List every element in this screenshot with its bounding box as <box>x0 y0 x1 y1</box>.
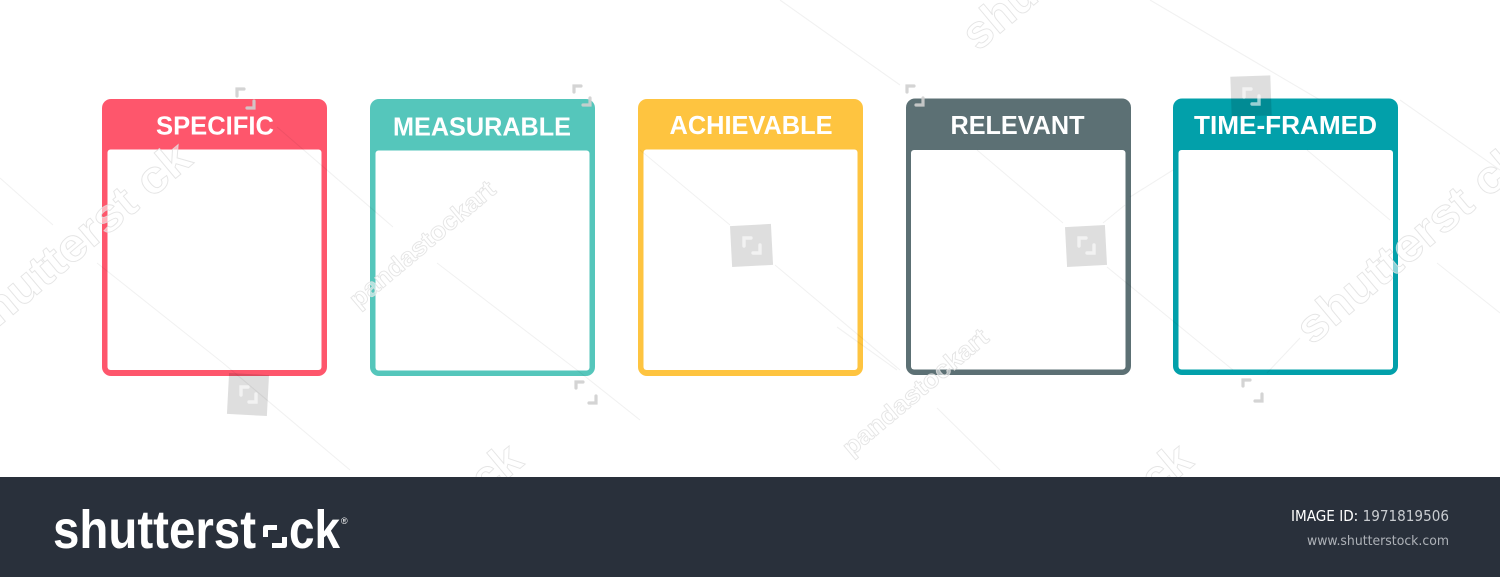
logo: shutterstock: shutterst <box>53 500 256 560</box>
logo: shutterstock: ® <box>341 516 348 526</box>
panel: achievable <box>638 99 863 376</box>
card body: achievable <box>644 150 858 370</box>
watermark layer: pandastockart <box>344 175 502 314</box>
heading: specific: SPECIFIC <box>156 110 274 140</box>
card body: time-framed <box>1178 150 1393 370</box>
panel: time-framed <box>1173 98 1398 375</box>
heading: achievable: ACHIEVABLE <box>670 110 832 140</box>
panel: relevant <box>906 98 1131 375</box>
card frame: measurable <box>370 99 595 376</box>
card frame: achievable <box>638 99 863 376</box>
card body: measurable <box>376 150 590 370</box>
website url: www.shutterstock.com <box>1307 533 1449 549</box>
watermark layer: ck <box>1129 432 1202 505</box>
watermark layer: pandastockart <box>837 323 995 462</box>
panel: specific <box>102 99 327 376</box>
card frame: specific <box>102 99 327 376</box>
watermark layer: ck <box>459 432 532 505</box>
card frame: relevant <box>906 98 1131 375</box>
footer bar <box>0 477 1500 577</box>
heading: measurable: MEASURABLE <box>393 112 571 142</box>
panel: measurable <box>370 99 595 376</box>
heading: relevant: RELEVANT <box>950 110 1085 140</box>
card body: relevant <box>911 150 1126 370</box>
image id: IMAGE ID: 1971819506 <box>1291 507 1449 525</box>
card body: specific <box>108 150 322 370</box>
heading: time-framed: TIME-FRAMED <box>1194 110 1377 140</box>
card frame: time-framed <box>1173 98 1398 375</box>
logo: shutterstock: ck <box>289 500 341 560</box>
